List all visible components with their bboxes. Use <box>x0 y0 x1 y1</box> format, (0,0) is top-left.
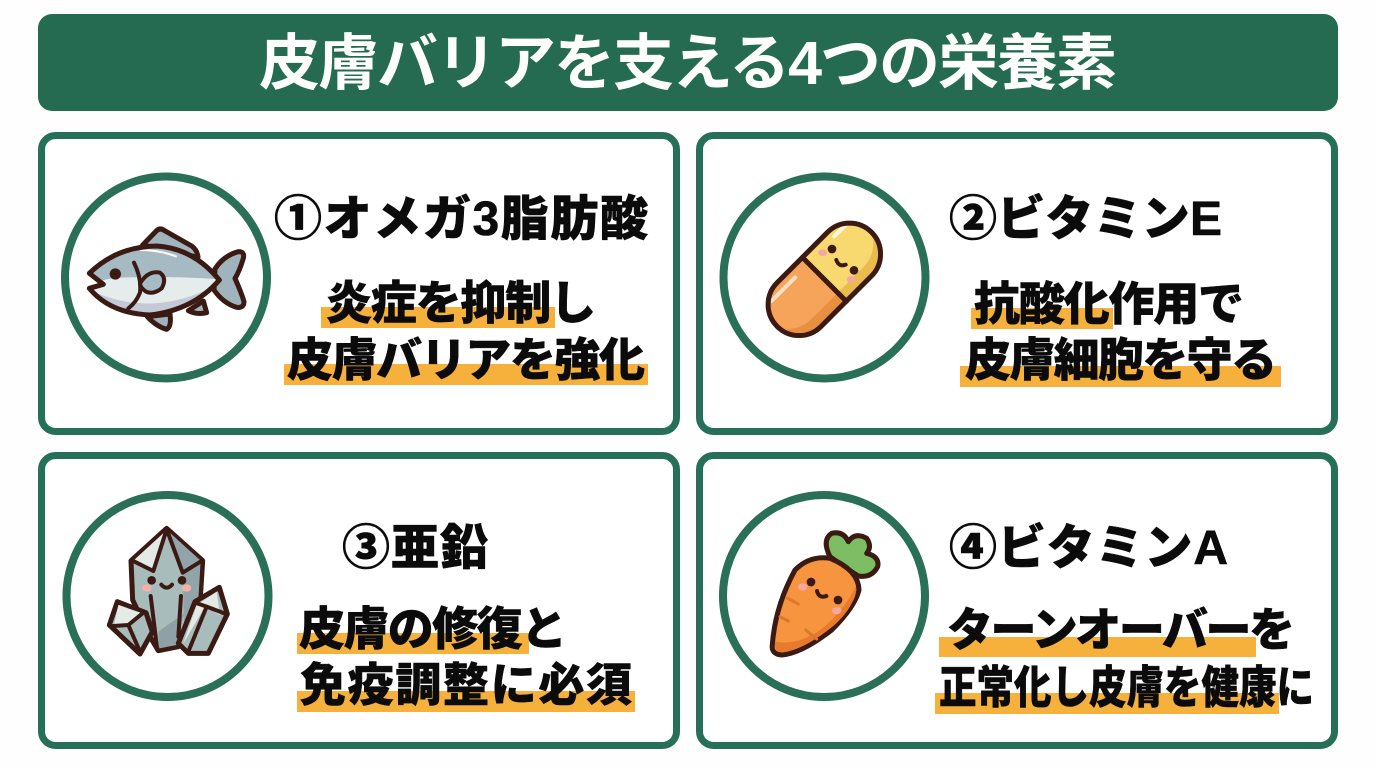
heading: ②ビタミンE <box>949 192 1222 246</box>
icon: carrot <box>723 495 925 697</box>
heading: ④ビタミンA <box>949 521 1228 575</box>
description <box>935 604 1314 714</box>
icon: crystals <box>66 495 268 697</box>
description: 皮膚バリアを強化 <box>287 334 645 386</box>
icon: fish <box>65 176 267 378</box>
description: 皮膚の修復と <box>299 603 567 655</box>
description: 炎症を抑制し <box>326 277 596 329</box>
description <box>960 278 1281 387</box>
panel: vitamin E <box>700 136 1334 432</box>
heading: ①オメガ3脂肪酸 <box>274 193 648 246</box>
panel: zinc <box>42 456 676 746</box>
panel: omega-3 <box>42 136 676 432</box>
description: 抗酸化作用で <box>974 278 1244 330</box>
icon: capsule <box>724 176 926 378</box>
description: 免疫調整に必須 <box>300 659 632 711</box>
panel: vitamin A <box>700 456 1334 746</box>
title: 皮膚バリアを支える4つの栄養素 <box>259 29 1117 97</box>
title banner <box>38 14 1338 111</box>
description: 正常化し皮膚を健康に <box>939 662 1314 713</box>
description: 皮膚細胞を守る <box>965 334 1277 386</box>
description: ターンオーバーを <box>947 604 1295 656</box>
description <box>297 603 635 712</box>
heading: ③亜鉛 <box>342 522 488 575</box>
description <box>284 277 648 386</box>
